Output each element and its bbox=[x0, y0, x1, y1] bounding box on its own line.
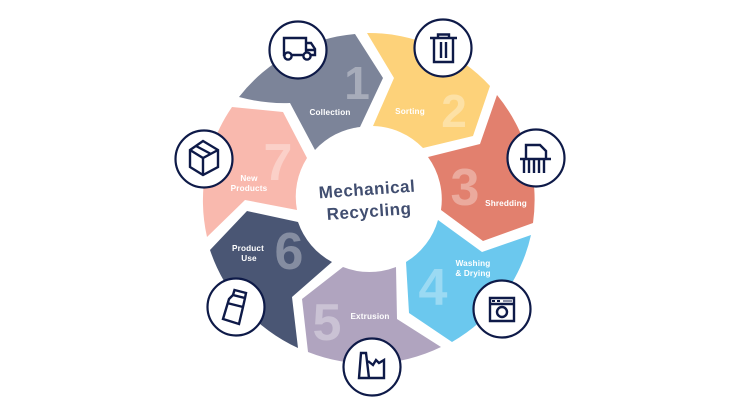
icon: box bbox=[176, 130, 232, 188]
segment 7: new products bbox=[203, 107, 307, 237]
segment 5: extrusion: 5 bbox=[313, 294, 341, 352]
segment 3: shredding: 3 bbox=[451, 159, 479, 217]
center title: Recycling bbox=[326, 199, 412, 224]
segment 7: new products: Products bbox=[231, 184, 268, 193]
segment 6: product use: Use bbox=[241, 254, 257, 263]
segment 6: product use bbox=[210, 211, 332, 348]
segment 2: sorting: Sorting bbox=[395, 107, 425, 116]
segment 1: collection: Collection bbox=[309, 108, 351, 117]
segment 5: extrusion bbox=[302, 267, 441, 364]
icon: factory bbox=[344, 338, 400, 396]
segment 4: washing and drying: 4 bbox=[419, 259, 448, 317]
segment 4: washing and drying: Washing bbox=[456, 259, 490, 268]
segment 6: product use: 6 bbox=[275, 223, 303, 281]
center title bbox=[318, 177, 416, 224]
segment 1: collection bbox=[239, 34, 383, 150]
center title: Mechanical bbox=[318, 177, 416, 202]
segment 5: extrusion: Extrusion bbox=[350, 312, 390, 321]
segment 7: new products: New bbox=[240, 174, 258, 183]
icon: bottle bbox=[208, 278, 264, 336]
segment 3: shredding: Shredding bbox=[485, 199, 527, 208]
segment 4: washing and drying: & Drying bbox=[455, 269, 491, 278]
icon: trash can bbox=[414, 20, 472, 76]
segment 7: new products: 7 bbox=[264, 134, 292, 192]
segment 6: product use: Product bbox=[232, 244, 264, 253]
segment 1: collection: 1 bbox=[344, 57, 370, 109]
icon: shredder bbox=[508, 130, 564, 186]
icon: truck bbox=[270, 22, 326, 78]
segment 3: shredding bbox=[428, 95, 535, 241]
segment 2: sorting bbox=[367, 33, 490, 148]
segment 2: sorting: 2 bbox=[441, 85, 467, 137]
segment 4: washing and drying bbox=[406, 220, 531, 342]
icon: washing machine bbox=[474, 280, 530, 338]
